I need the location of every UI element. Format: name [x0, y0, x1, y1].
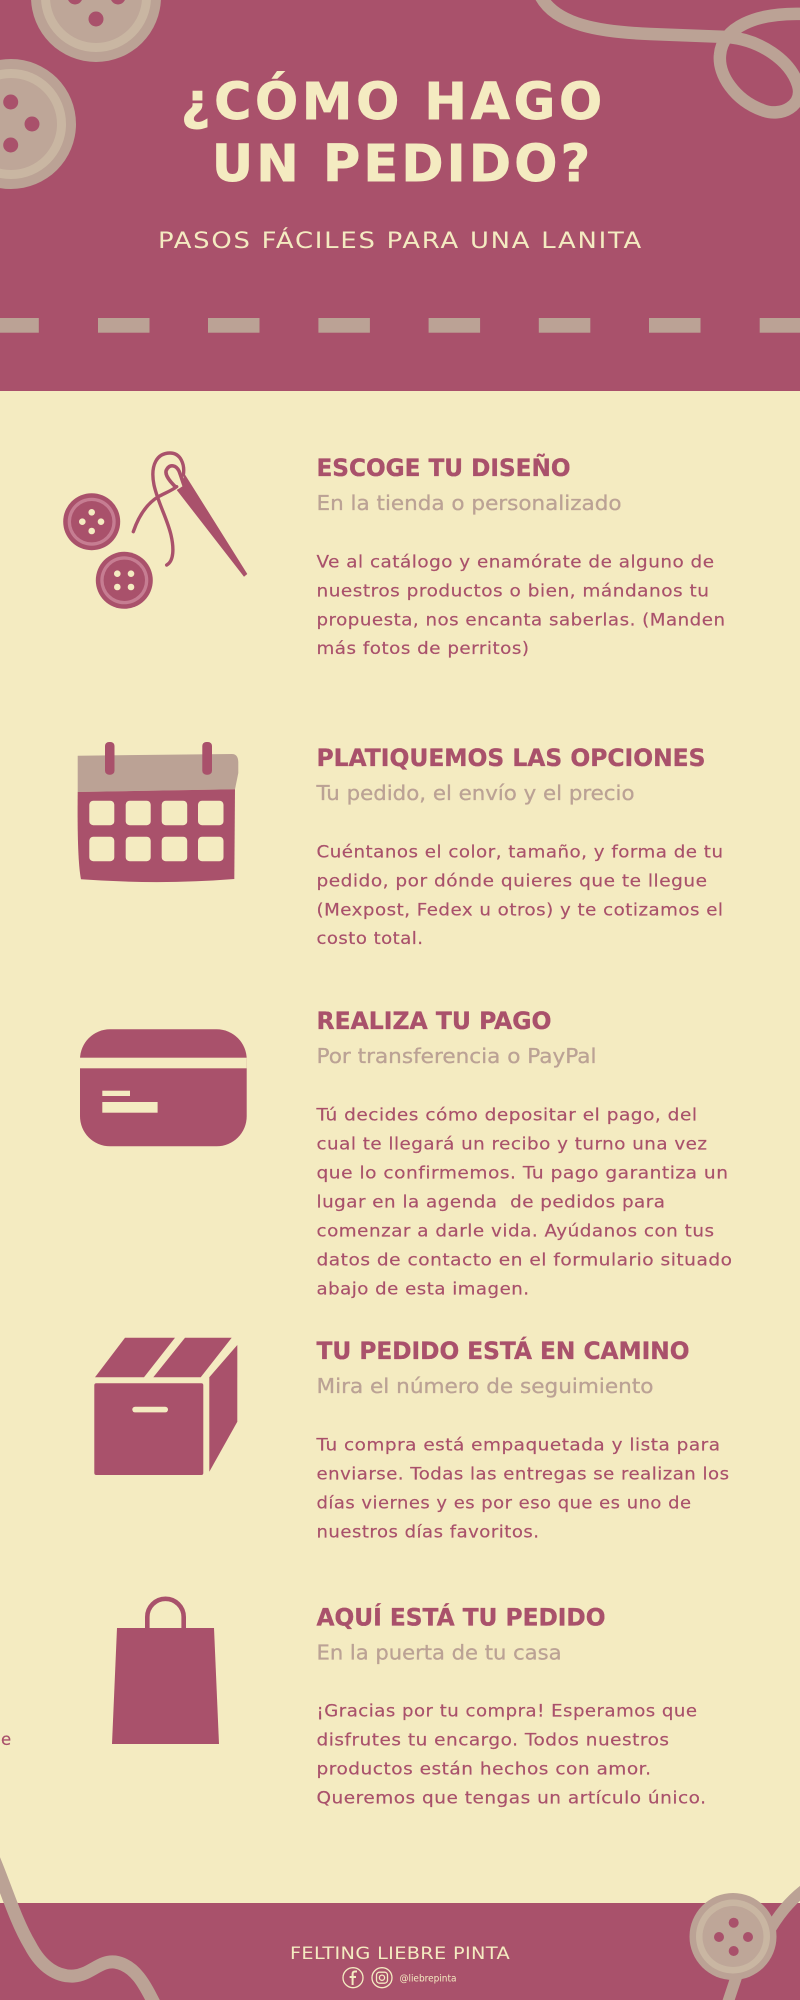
- body text: [315, 1105, 732, 1298]
- icon: facebook: [343, 1968, 363, 1988]
- body text: Ve al catálogo y enamórate de alguno de: [316, 552, 714, 571]
- panel: step 4: [94, 1336, 730, 1541]
- heading: TU PEDIDO ESTÁ EN CAMINO: [316, 1336, 690, 1365]
- icon: thread bottom right: [727, 1887, 800, 2000]
- icon: thread top right: [540, 0, 800, 112]
- body text: nuestros días favoritos.: [316, 1522, 540, 1541]
- body text: costo total.: [316, 929, 424, 948]
- body text: ¡Gracias por tu compra! Esperamos que: [316, 1701, 698, 1720]
- body text: que lo confirmemos. Tu pago garantiza un: [316, 1163, 728, 1182]
- icon: button bottom right: [690, 1893, 776, 1980]
- body text: [315, 1435, 730, 1541]
- subheading: Tu pedido, el envío y el precio: [315, 781, 634, 805]
- body text: [316, 842, 724, 948]
- heading: ESCOGE TU DISEÑO: [316, 453, 570, 482]
- icon: credit card: [80, 1029, 247, 1146]
- body text: abajo de esta imagen.: [316, 1279, 530, 1298]
- body text: propuesta, nos encanta saberlas. (Manden: [316, 610, 726, 629]
- heading: REALIZA TU PAGO: [316, 1007, 552, 1035]
- icon: button top: [31, 0, 161, 62]
- body text: disfrutes tu encargo. Todos nuestros: [316, 1730, 670, 1749]
- icon: instagram: [372, 1968, 392, 1988]
- body text: días viernes y es por eso que es uno de: [316, 1493, 692, 1512]
- icon: calendar: [78, 742, 238, 882]
- panel: step 3: [80, 1007, 732, 1298]
- body text: [316, 1701, 706, 1807]
- subtitle: PASOS FÁCILES PARA UNA LANITA: [158, 228, 643, 254]
- body text: Cuéntanos el color, tamaño, y forma de tu: [316, 842, 724, 861]
- body text: [316, 552, 726, 658]
- body text: Queremos que tengas un artículo único.: [316, 1788, 706, 1807]
- body text: comenzar a darle vida. Ayúdanos con tus: [316, 1221, 714, 1240]
- subheading: Por transferencia o PayPal: [316, 1044, 596, 1068]
- body text: lugar en la agenda de pedidos para: [316, 1192, 666, 1211]
- panel: step 1: [63, 453, 725, 658]
- icon: button left: [0, 59, 76, 189]
- body text: cual te llegará un recibo y turno una vez: [316, 1134, 708, 1153]
- footer brand name: FELTING LIEBRE PINTA: [290, 1944, 510, 1964]
- panel: footer: [0, 1855, 800, 2000]
- body text: más fotos de perritos): [316, 639, 530, 658]
- title: UN PEDIDO?: [212, 134, 590, 193]
- social handle: @liebrepinta: [400, 1974, 456, 1984]
- title: ¿CÓMO HAGO: [181, 72, 602, 131]
- body text: pedido, por dónde quieres que te llegue: [316, 871, 708, 890]
- body text: Tu compra está empaquetada y lista para: [315, 1435, 720, 1454]
- title: [181, 72, 602, 193]
- body text: (Mexpost, Fedex u otros) y te cotizamos el: [316, 900, 724, 919]
- subheading: En la tienda o personalizado: [316, 491, 622, 515]
- stray letter at left edge: e: [1, 1730, 12, 1749]
- panel: step 5: [112, 1599, 706, 1807]
- body text: enviarse. Todas las entregas se realizan los: [316, 1464, 730, 1483]
- subheading: Mira el número de seguimiento: [316, 1374, 654, 1398]
- icon: buttons, needle and thread: [63, 453, 247, 609]
- heading: PLATIQUEMOS LAS OPCIONES: [316, 744, 706, 772]
- body text: productos están hechos con amor.: [316, 1759, 652, 1778]
- body text: Tú decides cómo depositar el pago, del: [315, 1105, 698, 1124]
- icon: shopping bag: [112, 1599, 219, 1744]
- panel: step 2: [78, 742, 723, 948]
- icon: parcel box: [94, 1338, 237, 1475]
- stitched dashed line: [0, 318, 800, 333]
- subheading: En la puerta de tu casa: [316, 1640, 562, 1664]
- icon: thread bottom left: [0, 1855, 155, 2000]
- panel: header: [0, 0, 800, 391]
- body text: datos de contacto en el formulario situado: [316, 1250, 732, 1269]
- heading: AQUÍ ESTÁ TU PEDIDO: [316, 1603, 606, 1632]
- body text: nuestros productos o bien, mándanos tu: [316, 581, 710, 600]
